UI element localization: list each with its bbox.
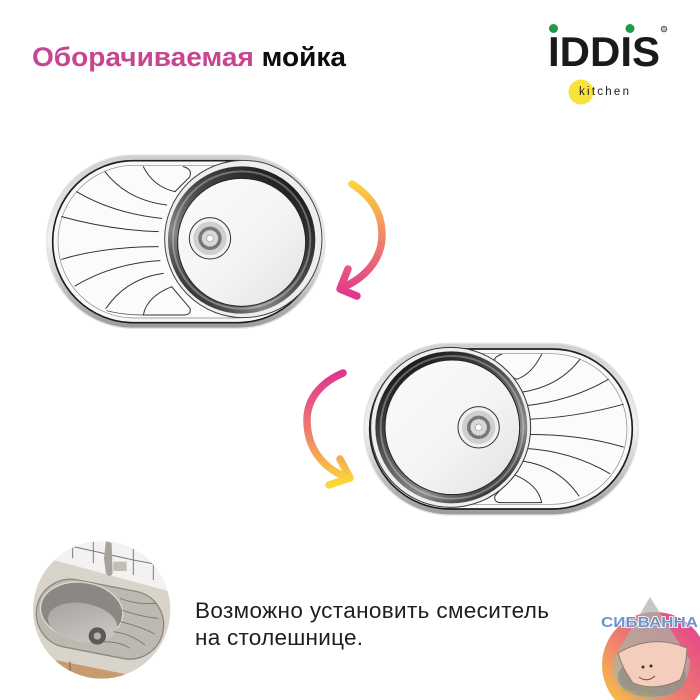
watermark: Сибванна: СИБВАННА xyxy=(601,615,699,631)
sink: drainboard on the right xyxy=(364,343,638,515)
title: Оборачиваемая мойка xyxy=(32,42,347,72)
description text: Возможно установить смеситель xyxy=(195,598,549,623)
description text xyxy=(195,598,549,650)
logo: IDDIS kitchen: IDDIS xyxy=(548,28,660,75)
logo: IDDIS kitchen: kitchen xyxy=(579,86,630,98)
arrow: counter-clockwise from top to bottom xyxy=(307,373,350,485)
logo: IDDIS kitchen xyxy=(548,24,667,104)
sink: drainboard on the left xyxy=(47,155,325,328)
arrow: clockwise from top to bottom xyxy=(340,184,382,296)
photo: installed sink xyxy=(33,541,170,679)
description text: на столешнице. xyxy=(195,625,363,650)
watermark: Сибванна xyxy=(601,597,700,700)
